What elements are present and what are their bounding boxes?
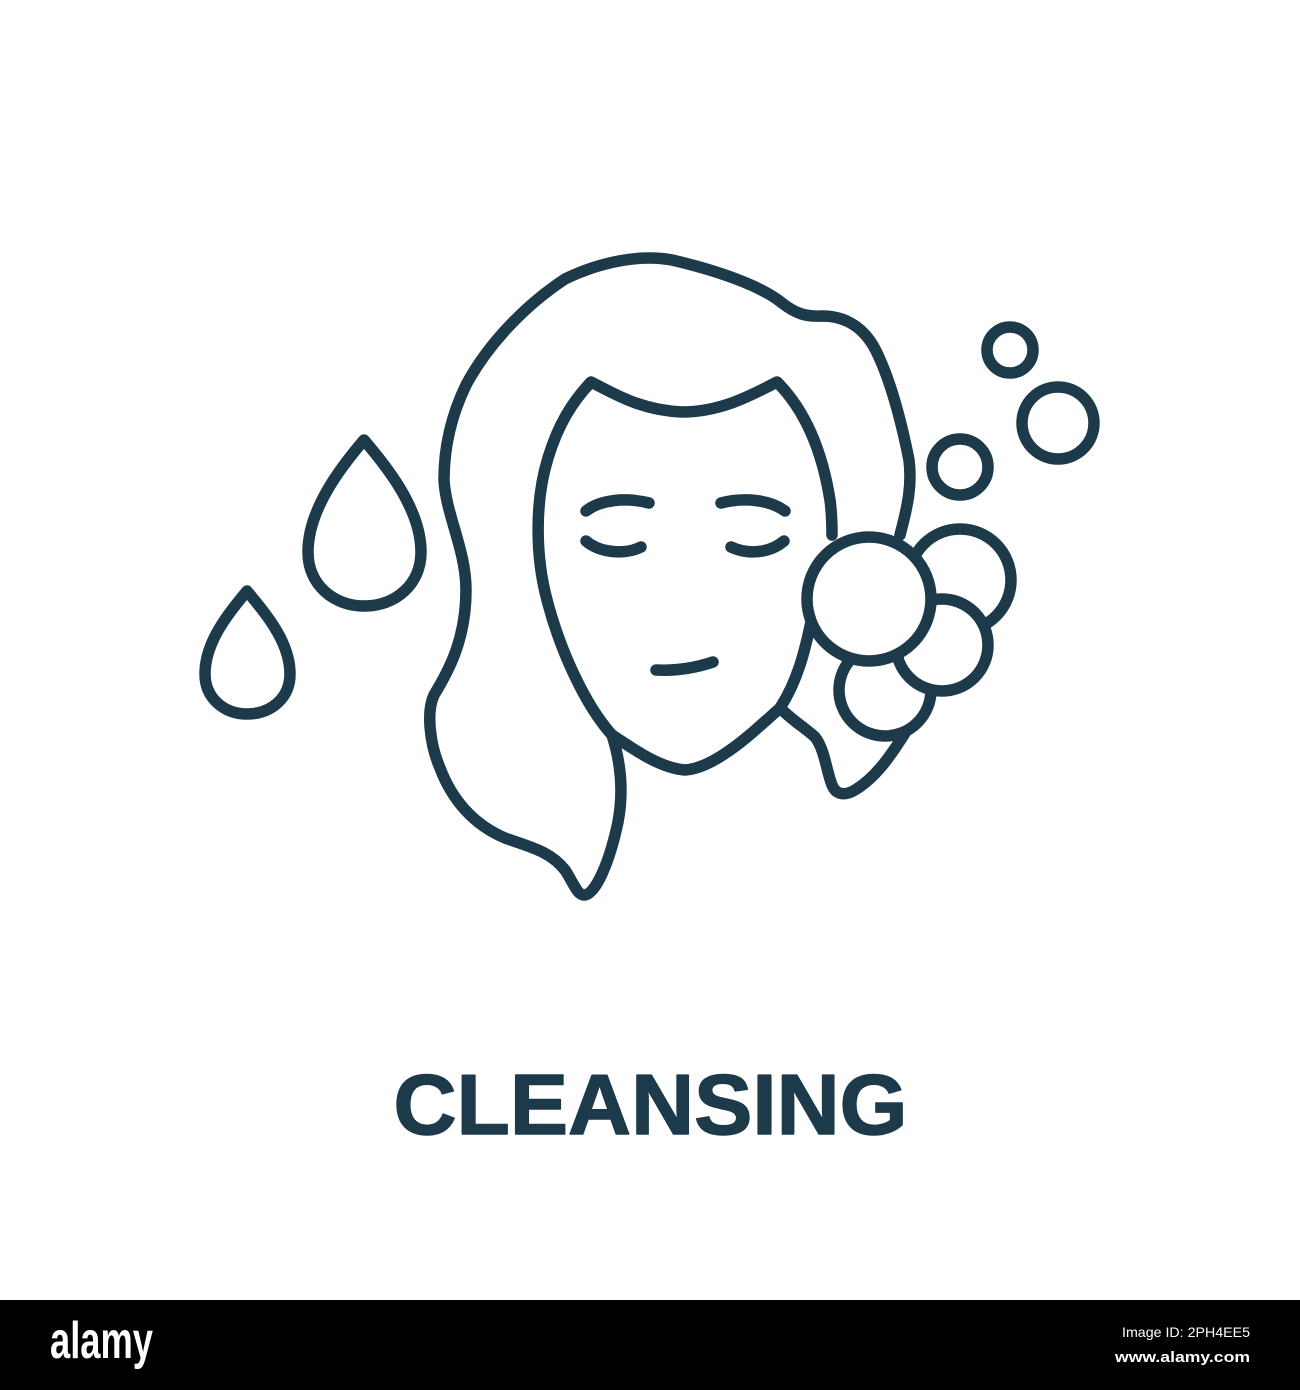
icon: large water drop xyxy=(308,440,421,606)
foam bubble: middle right xyxy=(896,599,988,691)
floating bubble: middle xyxy=(932,439,988,495)
left eyebrow xyxy=(586,500,649,511)
icon: woman's face with water drops and foam bubbles xyxy=(205,258,1094,895)
right closed eye xyxy=(731,541,784,552)
right eyebrow xyxy=(721,500,785,511)
website: www.alamy.com xyxy=(1114,1349,1250,1366)
foam bubble: upper right xyxy=(909,529,1011,631)
floating bubble: right large xyxy=(1022,387,1094,459)
footer bar xyxy=(0,1300,1300,1390)
title: cleansing: CLEANSING xyxy=(394,1058,908,1153)
icon: small water drop xyxy=(205,591,290,714)
hair lower right strand xyxy=(780,708,905,794)
foam bubble: lower xyxy=(839,644,931,736)
floating bubble: top small xyxy=(987,327,1033,373)
image id: Image ID: 2PH4EE5 xyxy=(1122,1324,1250,1340)
hair outline xyxy=(430,258,910,895)
logo: alamy: alamy xyxy=(50,1312,153,1370)
mouth xyxy=(656,662,713,670)
left closed eye xyxy=(586,541,641,552)
face outline xyxy=(538,382,832,770)
foam bubble: main xyxy=(807,537,931,661)
